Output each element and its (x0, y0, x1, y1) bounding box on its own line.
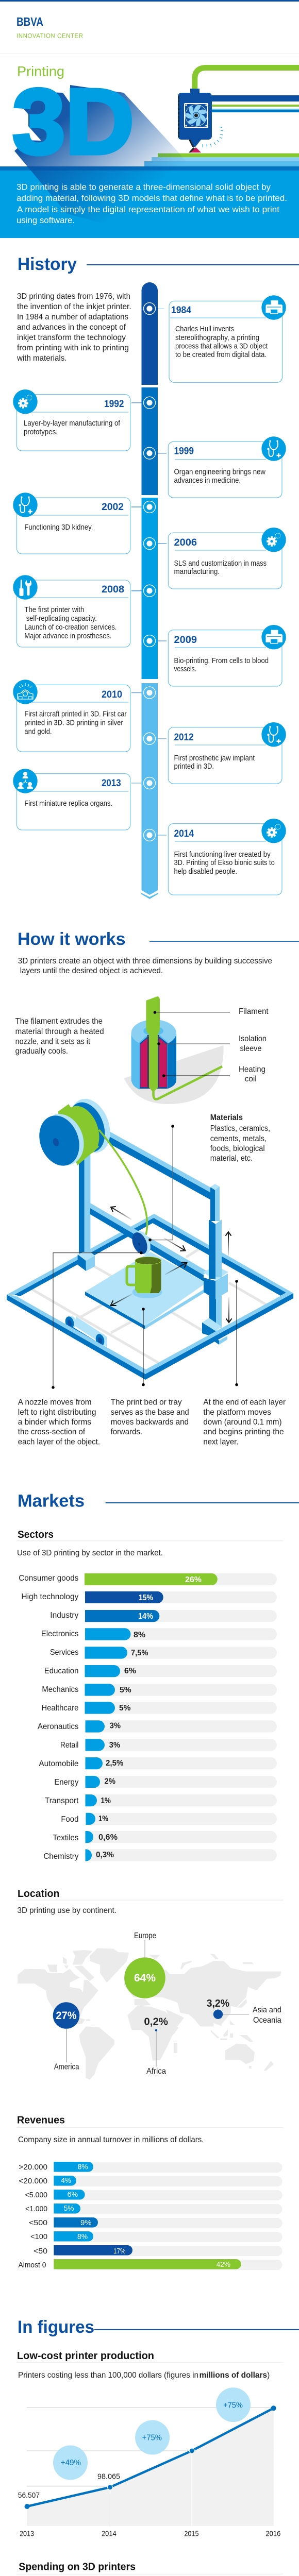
materials text: foods, biological (210, 1144, 265, 1153)
history intro text: and advances in the concept of (17, 323, 126, 332)
print layers (144, 153, 299, 166)
nozzle labels: Isolation (239, 1035, 267, 1043)
bar chart: sectors (19, 1573, 277, 1861)
text: platform column: the platform moves (203, 1408, 271, 1417)
nozzle labels: coil (245, 1075, 257, 1083)
card: 1999 (168, 436, 286, 498)
card: 1999: advances in medicine. (174, 477, 241, 485)
bar chart: revenues (19, 2162, 283, 2270)
card: 1984: Charles Hull invents (175, 325, 234, 333)
line chart: printer production: 2016 (265, 2530, 280, 2538)
bar chart: sectors: Mechanics (42, 1685, 78, 1694)
bar chart: revenues: Almost 0 (19, 2261, 46, 2269)
heading: In figures: In figures (18, 2317, 94, 2337)
nozzle labels (154, 1007, 269, 1083)
history intro text: from printing with ink to printing (17, 344, 129, 352)
bar chart: sectors: 2% (104, 1777, 115, 1786)
card: 2009: vessels. (174, 665, 196, 673)
history intro text: the invention of the inkjet printer. (17, 302, 131, 311)
card: 2008: Launch of co-creation services. (24, 623, 117, 632)
filament note: material through a heated (15, 1027, 104, 1036)
bar chart: sectors: Energy (54, 1778, 78, 1787)
bubble: Europe 64% (124, 1931, 165, 1998)
filament note: gradually cools. (15, 1047, 68, 1056)
how it works intro (18, 957, 272, 975)
title: Printing (17, 64, 64, 79)
subheading: Spending on 3D printers: Spending on 3D printers (19, 2561, 136, 2573)
bar chart: sectors: 0,3% (96, 1851, 114, 1859)
text: nozzle column: left to right distributing (18, 1408, 96, 1417)
bubble: America 27%: 27% (56, 2010, 77, 2022)
intro text: using software. (16, 215, 75, 225)
card: 2008: self-replicating capacity. (26, 615, 97, 623)
subheading: Sectors (16, 1529, 283, 1557)
card: 1999: Organ engineering brings new (174, 468, 265, 477)
bubble: Europe 64%: Europe (134, 1931, 156, 1940)
line chart: printer production: +75% (223, 2401, 243, 2410)
card: 2006: 2006 (174, 537, 197, 548)
card: 2012: printed in 3D. (174, 762, 214, 771)
subheading: Revenues: Revenues (17, 2114, 65, 2126)
card: 2008: Major advance in prostheses. (24, 632, 111, 640)
heading: Markets: Markets (18, 1491, 85, 1511)
text: platform column: At the end of each layer (203, 1398, 286, 1407)
header logo: BBVA (16, 15, 43, 28)
card: 2012: First prosthetic jaw implant (174, 754, 255, 762)
bar chart: revenues: 8% (78, 2163, 88, 2172)
line chart: printer production: 2014 (102, 2530, 117, 2538)
how it works intro: 3D printers create an object with three dimensions by building successive (18, 957, 272, 965)
bar chart: revenues: 8% (77, 2232, 88, 2241)
card: 2008: The first printer with (24, 606, 84, 614)
history intro text: with materials. (16, 354, 67, 363)
bar chart: sectors: 7,5% (131, 1649, 148, 1657)
card: 2002: Functioning 3D kidney. (24, 523, 93, 532)
intro text: 3D printing is able to generate a three-dimensional solid object by (16, 182, 271, 192)
text: print bed column (111, 1398, 189, 1436)
text: platform column: next layer. (203, 1438, 238, 1447)
text: nozzle column: the cross-section of (18, 1428, 86, 1436)
bar chart: revenues: 5% (64, 2204, 74, 2213)
bar chart: sectors: Retail (60, 1741, 78, 1750)
materials text (210, 1113, 270, 1163)
card: 1992 (13, 389, 130, 451)
bar chart: sectors: Services (50, 1648, 78, 1657)
card: 2013: First miniature replica organs. (24, 800, 112, 808)
title: 3D (12, 70, 134, 174)
line chart: printer production: +49% (61, 2459, 81, 2467)
bar chart: sectors: 14% (138, 1612, 153, 1621)
bar chart: sectors: 15% (139, 1594, 153, 1602)
bar chart: revenues: <100 (30, 2232, 47, 2241)
card: 2010 (13, 680, 130, 752)
intro text: A model is simply the digital representation of what we wish to print (17, 205, 279, 214)
bar chart: sectors: Industry (50, 1611, 78, 1620)
3D printer isometric illustration (7, 1093, 293, 1380)
subheading: Location: Location (18, 1888, 59, 1900)
card: 1984: to be created from digital data. (175, 351, 267, 359)
bar chart: sectors: Automobile (39, 1759, 78, 1768)
bar chart: sectors: 26% (185, 1575, 202, 1584)
text: nozzle column: each layer of the object. (18, 1438, 100, 1447)
card: 2014: 3D. Printing of Ekso bionic suits to (174, 859, 275, 867)
history intro text: 3D printing dates from 1976, with (17, 292, 130, 301)
card: 2013 (13, 769, 130, 830)
card: 2014: 2014 (174, 828, 194, 839)
subheading: Low-cost printer production (16, 2350, 283, 2380)
nozzle cross-section diagram (124, 996, 224, 1104)
text: print bed column: forwards. (111, 1428, 142, 1436)
card: 1984: stereolithography, a printing (175, 334, 259, 342)
nozzle labels: sleeve (240, 1044, 262, 1053)
intro band (0, 166, 299, 238)
nozzle labels: Filament (239, 1007, 269, 1016)
bar chart: sectors: 3% (110, 1722, 121, 1731)
bar chart: sectors: 1% (101, 1797, 111, 1805)
subheading: Sectors: Use of 3D printing by sector in the market. (17, 1549, 163, 1557)
bubble: Africa 0.2%: Africa (146, 2067, 166, 2076)
bar chart: revenues: <5.000 (25, 2191, 47, 2199)
bar chart: sectors: Transport (45, 1797, 79, 1805)
bar chart: sectors: Healthcare (41, 1704, 78, 1713)
line chart: printer production: +75% (142, 2434, 162, 2443)
filament note: The filament extrudes the (15, 1017, 103, 1026)
card: 2013: 2013 (102, 777, 121, 789)
heading: How it works: How it works (18, 929, 126, 949)
subheading: Low-cost printer production: ) (267, 2371, 270, 2380)
bar chart: sectors: Textiles (53, 1834, 78, 1842)
filament note (15, 1017, 104, 1056)
bar chart: sectors: High technology (21, 1592, 78, 1601)
filament note: nozzle, and it sets as it (15, 1038, 90, 1046)
printer leader lines (52, 1125, 238, 1389)
header logo (16, 15, 83, 39)
line chart: printer production (18, 2387, 280, 2538)
card: 1984: 1984 (171, 304, 191, 316)
intro text: adding material, following 3D models that define what is to be printed. (16, 193, 287, 203)
bar chart: revenues: 4% (61, 2176, 71, 2185)
subheading: Low-cost printer production: Printers costing less than 100,000 dollars (figures in (18, 2371, 198, 2380)
card: 2006: manufacturing. (174, 568, 220, 576)
subheading: Location (16, 1888, 283, 1915)
bar chart: sectors: 0,6% (98, 1833, 118, 1842)
bar chart: revenues: 17% (113, 2247, 126, 2256)
bubble: Asia and Oceania 3.2%: Oceania (253, 2016, 281, 2025)
bubble: America 27%: America (54, 2063, 79, 2072)
timeline bar (141, 282, 158, 899)
text: platform column: and begins printing the (203, 1428, 284, 1436)
bar chart: sectors: Chemistry (43, 1852, 78, 1861)
world map (18, 1948, 281, 2080)
bar chart: revenues: 6% (68, 2190, 78, 2199)
card: 1992: Layer-by-layer manufacturing of (24, 419, 121, 428)
text: platform column (203, 1398, 286, 1447)
materials text: material, etc. (210, 1154, 253, 1163)
text: nozzle column: A nozzle moves from (18, 1398, 92, 1407)
bar chart: revenues: 9% (80, 2218, 92, 2227)
card: 2009: Bio-printing. From cells to blood (174, 657, 269, 665)
printer head hero illustration (178, 68, 299, 152)
card: 2009: 2009 (174, 634, 197, 646)
how it works intro: layers until the desired object is achieved. (20, 967, 163, 975)
bubble: America 27% (53, 2002, 79, 2072)
bubble: Europe 64%: 64% (134, 1972, 156, 1984)
bar chart: sectors: Consumer goods (19, 1574, 78, 1583)
bar chart: sectors: 3% (109, 1741, 120, 1750)
bar chart: revenues: >20.000 (19, 2163, 47, 2172)
line chart: printer production: 2015 (184, 2530, 199, 2538)
subheading: Location: 3D printing use by continent. (18, 1906, 117, 1915)
card: 1984: process that allows a 3D object (175, 343, 268, 351)
card: 2006: SLS and customization in mass (174, 560, 267, 568)
card: 1999: 1999 (174, 446, 194, 457)
bar chart: sectors: 2,5% (106, 1759, 123, 1768)
heading: History: History (18, 255, 77, 274)
card: 2010: printed in 3D. 3D printing in silver (24, 719, 123, 727)
bar chart: sectors: Aeronautics (38, 1722, 78, 1731)
subheading: Low-cost printer production: millions of dollars (200, 2371, 267, 2380)
materials text: Plastics, ceramics, (210, 1124, 270, 1133)
line chart: printer production: 56.507 (18, 2491, 40, 2500)
timeline connectors (131, 309, 167, 835)
card: 1992: 1992 (104, 398, 124, 410)
bar chart: revenues: <50 (34, 2247, 47, 2256)
card: 2010: and gold. (24, 728, 52, 736)
history intro text: inkjet transform the technology (17, 333, 126, 342)
card: 1992: prototypes. (24, 428, 58, 436)
bar chart: sectors: Food (61, 1815, 78, 1824)
intro text (16, 182, 287, 225)
text: print bed column: serves as the base and (111, 1408, 189, 1417)
card: 2008 (13, 575, 130, 647)
card: 2006 (168, 528, 286, 589)
nozzle labels: Heating (239, 1065, 265, 1074)
header logo: INNOVATION CENTER (16, 33, 83, 39)
subheading: Revenues: Company size in annual turnover in millions of dollars. (18, 2136, 204, 2144)
card: 2012: 2012 (174, 732, 194, 743)
bar chart: revenues: 42% (217, 2260, 230, 2269)
card: 2014 (168, 819, 286, 895)
bar chart: sectors: 8% (134, 1631, 145, 1639)
card: 2014: help disabled people. (174, 868, 237, 876)
text: print bed column: moves backwards and (111, 1418, 189, 1427)
bar chart: sectors: Electronics (41, 1630, 78, 1638)
bubble: Asia and Oceania 3.2% (207, 1998, 281, 2025)
card: 2002 (13, 493, 130, 554)
bar chart: sectors: 6% (124, 1667, 136, 1675)
bar chart: revenues: <20.000 (19, 2177, 47, 2185)
text: platform column: down (around 0.1 mm) (203, 1418, 281, 1427)
card: 2008: 2008 (102, 584, 124, 595)
card: 2010: 2010 (102, 689, 122, 700)
bubble: Asia and Oceania 3.2%: 3,2% (207, 1998, 229, 2009)
bar chart: sectors: 5% (119, 1704, 131, 1713)
bubble: Asia and Oceania 3.2%: Asia and (253, 2006, 281, 2014)
history intro text (16, 292, 131, 363)
bubble: Africa 0.2% (144, 2016, 168, 2076)
card: 2010: First aircraft printed in 3D. First car (24, 710, 127, 719)
long shadow of 3D (14, 85, 206, 237)
subheading: Sectors: Sectors (18, 1529, 54, 1540)
motion arrows (111, 1207, 231, 1323)
card: 2014: First functioning liver created by (174, 851, 271, 859)
card: 2009 (168, 625, 286, 686)
text: nozzle column: a binder which forms (18, 1418, 91, 1427)
history intro text: In 1984 a number of adaptations (17, 313, 128, 321)
card: 2002: 2002 (102, 501, 124, 513)
bar chart: sectors: 1% (98, 1815, 108, 1823)
text: print bed column: The print bed or tray (111, 1398, 182, 1407)
line chart: printer production: 98.065 (97, 2472, 120, 2481)
bar chart: revenues: <1.000 (25, 2205, 47, 2213)
subheading: Low-cost printer production: Low-cost printer production (17, 2350, 154, 2362)
card: 2012 (168, 722, 286, 784)
bar chart: revenues: <500 (29, 2218, 47, 2227)
top bar (0, 0, 299, 2)
materials text: Materials (210, 1113, 243, 1122)
materials text: cements, metals, (210, 1134, 267, 1143)
text: nozzle column (18, 1398, 100, 1447)
bubble: Africa 0.2%: 0,2% (144, 2016, 168, 2028)
line chart: printer production: 2013 (20, 2530, 34, 2538)
bar chart: sectors: Education (44, 1667, 78, 1675)
card: 1984 (169, 295, 286, 382)
subheading: Revenues (16, 2114, 283, 2144)
bar chart: sectors: 5% (120, 1686, 131, 1694)
